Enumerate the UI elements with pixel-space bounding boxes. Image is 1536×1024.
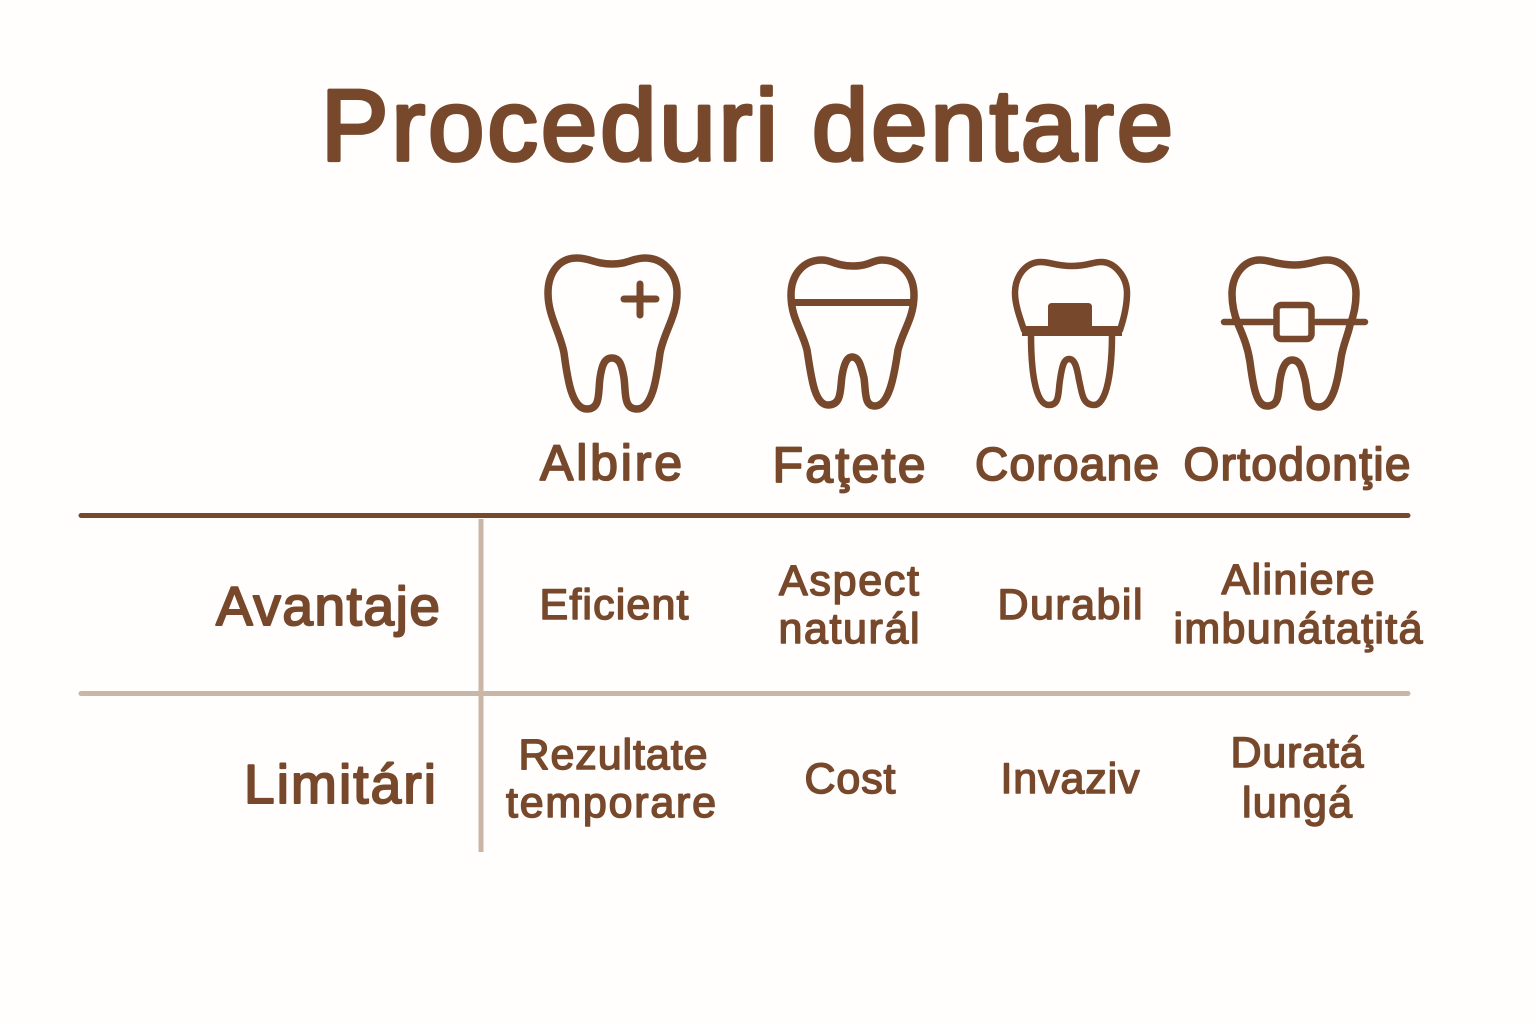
table header rule: [81, 513, 1408, 518]
cell: Eficient: Eficient: [540, 581, 689, 629]
column heading: Ortodontie: Ortodonţie: [1184, 438, 1410, 490]
column heading: Fatete: Faţete: [772, 437, 926, 493]
icon: tooth with braces: [1224, 260, 1365, 407]
icon: tooth with crown: [1015, 262, 1127, 405]
cell: Aliniere imbunatatita: [1174, 556, 1423, 653]
cell: Rezultate temporare: Rezultate: [518, 731, 708, 779]
cell: Durabil: Durabil: [998, 581, 1142, 629]
cell: Aspect natural: Aspect: [779, 557, 919, 605]
column heading: Coroane: Coroane: [975, 438, 1159, 490]
cell: Aliniere imbunatatita: Aliniere: [1222, 556, 1374, 604]
cell: Aliniere imbunatatita: imbunátaţitá: [1174, 605, 1423, 653]
title: Proceduri dentare: [321, 70, 1173, 182]
cell: Invaziv: Invaziv: [1000, 755, 1140, 803]
cell: Cost: Cost: [804, 755, 896, 803]
cell: Rezultate temporare: [506, 731, 716, 827]
row label: Limitari: Limitári: [244, 753, 436, 815]
cell: Aspect natural: [778, 557, 920, 653]
icon: tooth with veneer: [791, 260, 914, 406]
cell: Durata lunga: Duratá: [1230, 729, 1364, 777]
table row divider: [81, 691, 1408, 696]
cell: Aspect natural: naturál: [778, 605, 920, 653]
row label: Avantaje: Avantaje: [216, 575, 440, 637]
cell: Durata lunga: lungá: [1242, 779, 1352, 827]
column heading: Albire: Albire: [540, 435, 682, 491]
icon: tooth whitening with plus: [548, 258, 677, 409]
table column divider: [478, 519, 484, 852]
cell: Durata lunga: [1230, 729, 1364, 827]
cell: Rezultate temporare: temporare: [506, 779, 716, 827]
